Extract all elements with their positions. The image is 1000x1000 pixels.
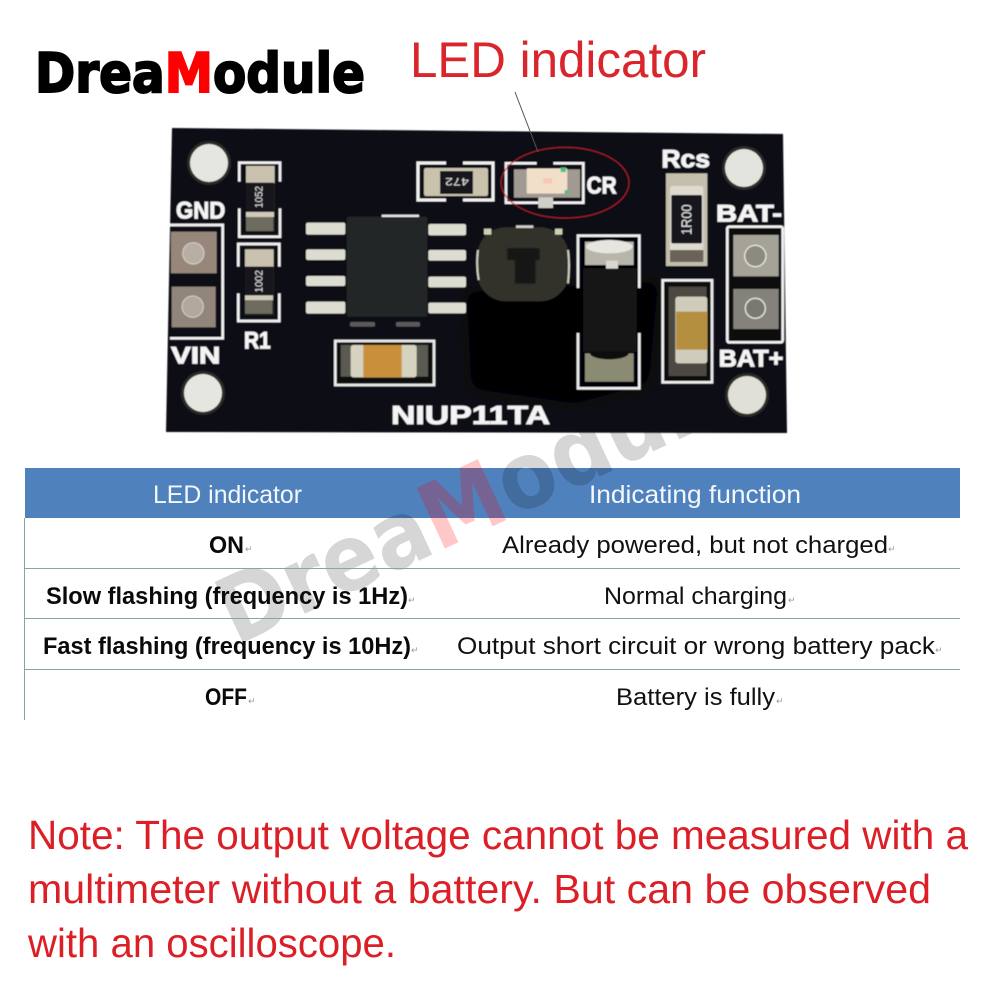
ceramic capacitor horizontal [335,341,434,385]
LED highlight ellipse [501,147,629,218]
mounting holes [181,141,769,417]
label GND: GND [176,197,225,224]
row 2 function mark: ↵ [788,596,796,606]
row 1 function mark: ↵ [888,545,896,555]
board substrate [166,128,787,433]
ceramic capacitor vertical [663,280,712,382]
label Rcs: Rcs [661,147,710,174]
row 1 indicator: ON [209,532,244,559]
heading: LED indicator: LED indicator [410,32,706,88]
shadow around inductor and diode [465,280,660,405]
header: Indicating function: Indicating function [589,481,801,509]
note line 1: Note: The output voltage cannot be measured with a [28,812,968,858]
resistor 472: 472 [445,175,469,187]
label R1: R1 [244,327,271,354]
row 2 mark: ↵ [408,596,416,606]
label VIN: VIN [171,342,220,369]
label CR: CR [587,172,617,199]
row 4 mark: ↵ [248,697,256,707]
circuit board photo [166,128,787,433]
IC chip with pins [306,215,466,327]
table [24,481,960,720]
diode [575,236,642,388]
row 4 function: Battery is fully [616,684,775,711]
row 3 function: Output short circuit or wrong battery pack [457,633,936,660]
callout leader line [515,92,538,152]
resistor 1052: 1052 [254,186,266,208]
row 3 indicator: Fast flashing (frequency is 10Hz) [43,633,411,660]
right half components [477,147,783,388]
BAT output pads [727,227,783,342]
resistor 1002 [238,244,279,321]
note line 2: multimeter without a battery. But can be observed [28,866,931,912]
power inductor [477,225,569,301]
table header band [25,468,960,518]
row 2 indicator: Slow flashing (frequency is 1Hz) [46,583,408,610]
row 3 function mark: ↵ [935,646,943,656]
logo: DreaModule: DreaModule [35,42,365,105]
label BAT-: BAT- [716,201,782,228]
row 1 mark: ↵ [245,545,253,555]
resistor 1R00: 1R00 [680,204,696,235]
row 2 function: Normal charging [604,583,787,610]
row 1 function: Already powered, but not charged [502,532,888,559]
resistor 472 [418,163,493,200]
note text [27,812,968,966]
header: LED indicator: LED indicator [153,481,302,509]
label BAT+: BAT+ [719,346,783,373]
left half components [170,163,466,385]
resistor 1052 [239,163,280,237]
note line 3: with an oscilloscope. [27,920,396,966]
row 4 function mark: ↵ [776,697,784,707]
silkscreen label NIUP11TA: NIUP11TA [391,400,550,430]
row 4 indicator: OFF [205,684,247,711]
GND and VIN input pads [170,225,223,338]
LED component [506,163,583,208]
row 3 mark: ↵ [411,646,419,656]
watermark: DreaModule: DreaModule [200,329,759,666]
resistor 1002: 1002 [254,270,266,293]
resistor 1R00 [666,173,707,266]
